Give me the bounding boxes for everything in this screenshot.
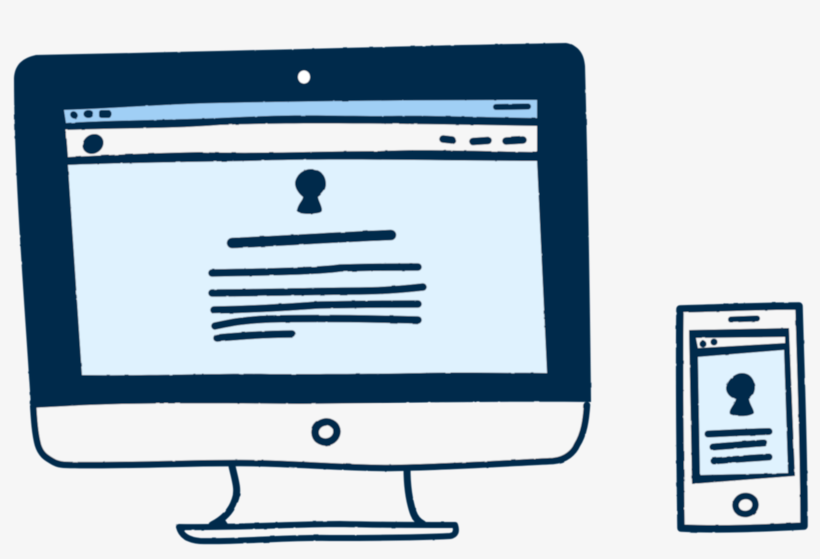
nav items xyxy=(443,139,523,142)
phone browser bar xyxy=(696,337,785,348)
text lines xyxy=(212,267,423,338)
phone page xyxy=(698,350,788,475)
phone dots xyxy=(700,338,718,348)
window controls xyxy=(69,106,528,120)
monitor bezel xyxy=(14,43,591,408)
phone body xyxy=(680,306,804,529)
icon: phone xyxy=(680,306,804,529)
phone home button xyxy=(734,494,757,516)
browser page xyxy=(68,160,547,375)
monitor stand xyxy=(179,466,456,541)
phone keyhole xyxy=(726,373,755,416)
window dots xyxy=(69,110,111,120)
icon: desktop monitor xyxy=(14,43,591,541)
power button xyxy=(313,419,339,445)
phone screen xyxy=(689,328,795,484)
speaker xyxy=(731,318,757,320)
camera xyxy=(298,70,310,84)
browser toolbar xyxy=(66,123,537,157)
keyhole icon xyxy=(295,169,326,214)
browser title bar xyxy=(64,100,537,123)
avatar xyxy=(79,130,107,158)
monitor chin xyxy=(33,402,587,468)
heading bar xyxy=(232,235,391,243)
phone text lines xyxy=(708,432,769,461)
